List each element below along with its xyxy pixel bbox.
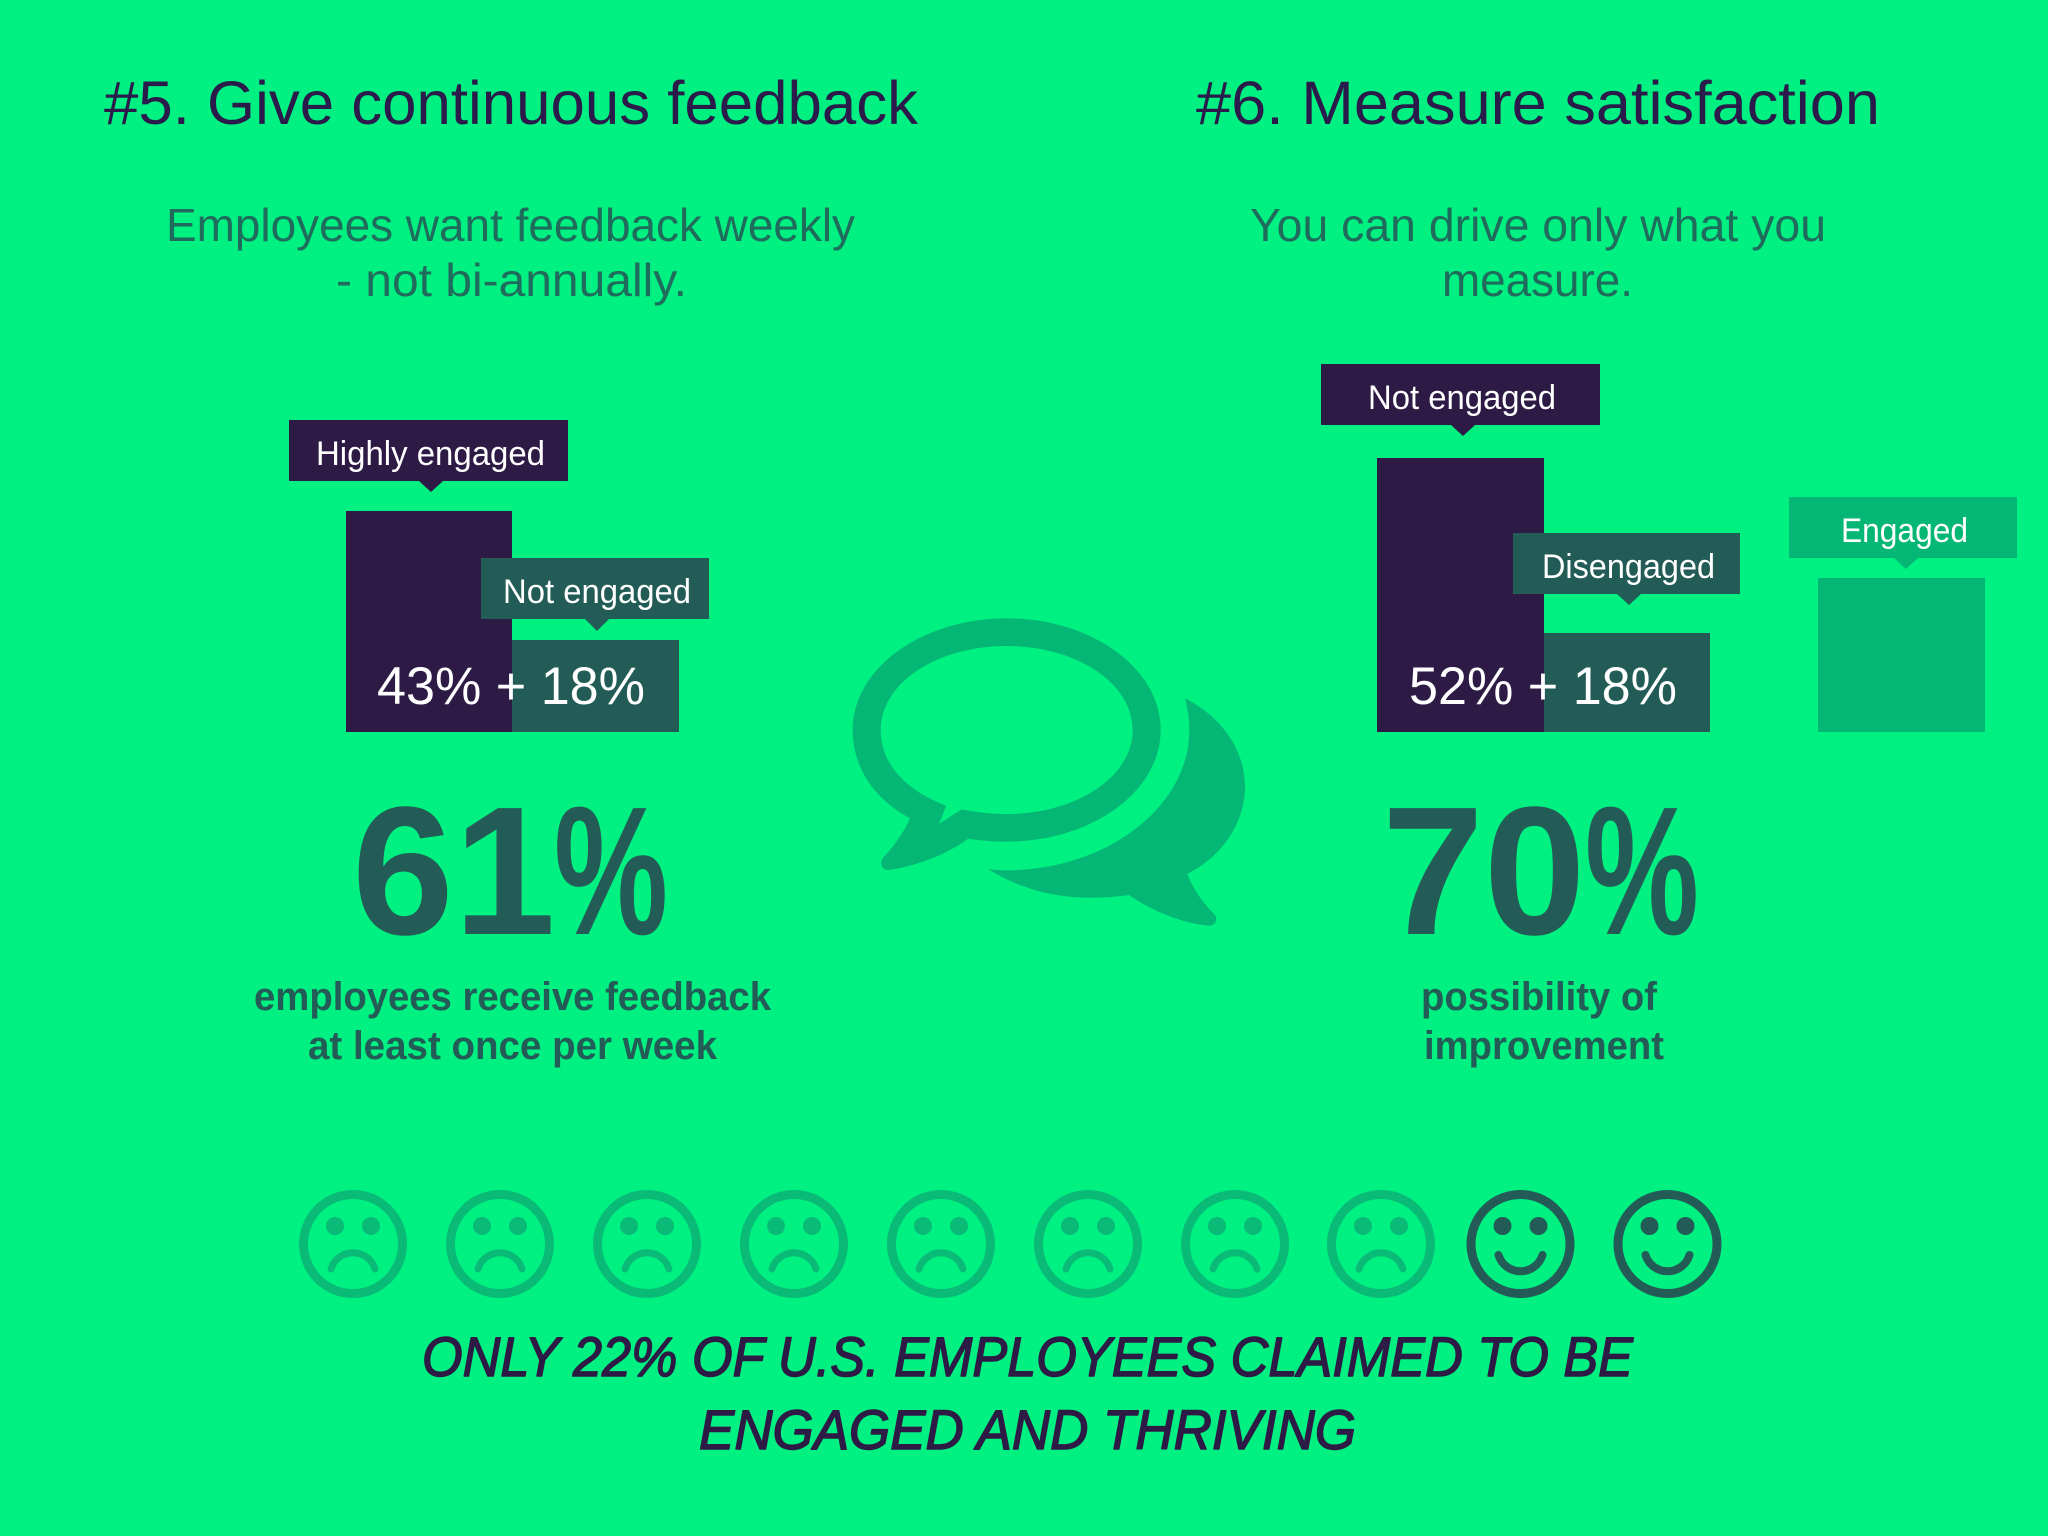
big number: 70%: % <box>1585 768 1699 973</box>
callout: disengaged: Disengaged <box>1542 548 1715 586</box>
big number: 61%: 61 <box>352 768 556 973</box>
bar values: 43% + 18% <box>377 657 645 716</box>
icon: sad face 7 <box>1186 1194 1284 1294</box>
bar: highly engaged <box>346 511 512 732</box>
icon: sad face 2 <box>450 1194 550 1294</box>
caption: 70%: possibility of <box>1421 975 1658 1019</box>
panel: #6 measure satisfaction <box>1196 69 2017 1068</box>
callout: highly engaged: Highly engaged <box>316 435 545 473</box>
bar chart: satisfaction engagement <box>1321 364 2017 732</box>
callout: engaged and thriving statement <box>422 1325 1634 1461</box>
text block: measure intro <box>1250 199 1826 306</box>
text block: feedback intro: - not bi-annually. <box>336 254 687 306</box>
callout: not engaged: Not engaged <box>1368 379 1556 417</box>
big number: 70%: 70 <box>1382 768 1586 973</box>
callout: not engaged <box>1321 364 1600 436</box>
heading: #6: #6. Measure satisfaction <box>1196 69 1880 137</box>
bar: engaged <box>1818 578 1985 732</box>
caption: 61%: employees receive feedback <box>254 975 772 1019</box>
caption: 70%: improvement <box>1424 1024 1664 1068</box>
text block: measure intro: You can drive only what you <box>1250 199 1826 251</box>
heading: #5: #5. Give continuous feedback <box>104 69 918 137</box>
icon: sad face 5 <box>892 1194 990 1294</box>
icon row: 8 sad and 2 happy faces <box>304 1194 1717 1294</box>
callout: engaged <box>1789 497 2017 569</box>
icon: happy face 2 <box>1618 1194 1717 1294</box>
icon: sad face 8 <box>1332 1194 1430 1294</box>
caption: 70% <box>1421 975 1664 1068</box>
bar chart: feedback engagement <box>289 420 709 732</box>
bar: disengaged <box>1544 633 1710 732</box>
icon: sad face 4 <box>744 1194 844 1294</box>
big number: 61%: % <box>554 768 668 973</box>
text block: measure intro: measure. <box>1442 254 1633 306</box>
text block: feedback intro <box>166 199 855 306</box>
caption: 61%: at least once per week <box>308 1024 718 1068</box>
icon: sad face 1 <box>304 1194 402 1294</box>
callout: disengaged <box>1513 533 1740 605</box>
bar: not engaged <box>512 640 679 732</box>
callout: engaged and thriving statement: ONLY 22% OF U.S. EMPLOYEES CLAIMED TO BE <box>422 1325 1634 1388</box>
panel: #5 continuous feedback <box>104 69 918 1068</box>
bar: not engaged <box>1377 458 1544 732</box>
caption: 61% <box>254 975 772 1068</box>
icon: happy face 1 <box>1471 1194 1570 1294</box>
callout: engaged and thriving statement: ENGAGED AND THRIVING <box>699 1398 1356 1461</box>
icon: sad face 6 <box>1038 1194 1138 1294</box>
callout: not engaged: Not engaged <box>503 573 691 611</box>
callout: not engaged <box>481 558 709 631</box>
text block: feedback intro: Employees want feedback weekly <box>166 199 855 251</box>
icon: sad face 3 <box>598 1194 696 1294</box>
bar values: 52% + 18% <box>1409 657 1677 716</box>
callout: highly engaged <box>289 420 568 492</box>
callout: engaged: Engaged <box>1841 512 1968 550</box>
icon: chat bubbles <box>853 618 1245 926</box>
